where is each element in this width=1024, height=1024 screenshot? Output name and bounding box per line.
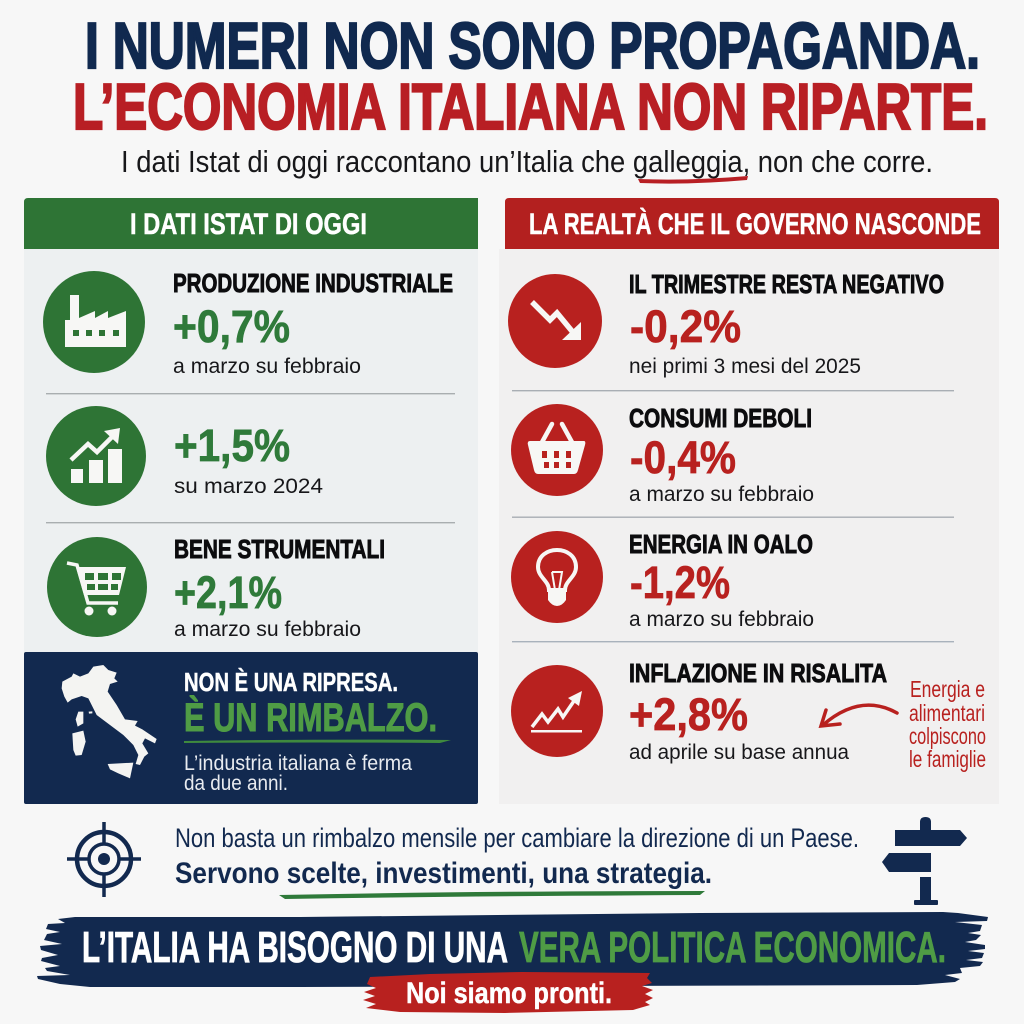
icon: rising line — [511, 665, 603, 757]
handwritten note: colpiscono — [909, 723, 986, 749]
icon: factory — [43, 271, 145, 373]
icon: basket — [511, 404, 603, 496]
icon: falling arrow — [508, 274, 602, 368]
handwritten note: le famiglie — [909, 746, 986, 772]
note: nei primi 3 mesi del 2025 — [629, 355, 861, 378]
value: +2,8% — [629, 689, 748, 740]
icon: map of Italy — [62, 665, 157, 778]
row: inflazione — [511, 658, 887, 764]
callout: non è una ripresa: da due anni. — [184, 772, 288, 795]
title — [73, 9, 988, 143]
row: produzione industriale — [43, 268, 453, 378]
value: -0,4% — [630, 432, 736, 483]
message line 2: Servono scelte, investimenti, una strategia. — [175, 857, 712, 890]
closing message — [175, 823, 859, 899]
red header — [505, 198, 999, 249]
value: +2,1% — [174, 567, 282, 618]
banner: vera politica economica — [37, 912, 988, 987]
handwritten note — [909, 676, 986, 772]
icon: light bulb — [511, 531, 603, 623]
red brush stroke — [363, 972, 653, 1013]
row: consumi — [511, 403, 814, 506]
navy box — [24, 652, 478, 804]
label: BENE STRUMENTALI — [174, 534, 385, 564]
banner text white: L’ITALIA HA BISOGNO DI UNA — [82, 923, 508, 972]
icon: shopping cart — [47, 537, 147, 637]
green header: I DATI ISTAT DI OGGI — [130, 208, 367, 241]
callout note: L’industria italiana è ferma — [184, 752, 412, 775]
red banner text: Noi siamo pronti. — [406, 977, 612, 1010]
handwritten note: alimentari — [909, 700, 985, 726]
label: ENERGIA IN OALO — [629, 529, 813, 559]
icon: target — [67, 822, 141, 897]
row: bene strumentali — [47, 534, 385, 641]
panel background — [24, 249, 478, 653]
note: ad aprile su base annua — [629, 741, 849, 764]
note: su marzo 2024 — [174, 475, 323, 498]
green header — [24, 198, 478, 249]
callout line 2: È UN RIMBALZO. — [184, 695, 437, 740]
callout: non è una ripresa — [24, 652, 478, 804]
arrow: curved red — [821, 705, 897, 726]
label: INFLAZIONE IN RISALITA — [629, 658, 887, 688]
value: +1,5% — [174, 420, 290, 471]
label: PRODUZIONE INDUSTRIALE — [173, 268, 453, 298]
row: su marzo 2024 — [46, 406, 323, 506]
banner: noi siamo pronti — [363, 972, 653, 1013]
value: +0,7% — [173, 301, 290, 352]
row: energia — [511, 529, 814, 631]
callout line 1: NON È UNA RIPRESA. — [184, 667, 398, 697]
value: -1,2% — [630, 557, 730, 608]
row: trimestre — [508, 269, 944, 378]
panel background — [499, 249, 999, 804]
panel: la realtà — [499, 198, 999, 804]
icon: rising bars — [46, 406, 146, 506]
note: a marzo su febbraio — [173, 355, 361, 378]
handwritten note: Energia e — [910, 676, 985, 702]
value: -0,2% — [630, 301, 741, 352]
note: a marzo su febbraio — [629, 483, 814, 506]
note: a marzo su febbraio — [629, 608, 814, 631]
subtitle text: I dati Istat di oggi raccontano un’Italia che galleggia, non che corre. — [121, 144, 933, 179]
navy brush stroke — [37, 912, 988, 987]
green stroke — [279, 891, 705, 899]
panel: dati istat — [24, 198, 478, 653]
message line 1: Non basta un rimbalzo mensile per cambiare la direzione di un Paese. — [175, 823, 859, 853]
red underline — [638, 176, 748, 184]
subtitle — [121, 144, 933, 184]
label: CONSUMI DEBOLI — [629, 403, 812, 433]
icon: signpost — [882, 817, 967, 905]
green stroke — [184, 740, 451, 743]
note: a marzo su febbraio — [174, 618, 361, 641]
